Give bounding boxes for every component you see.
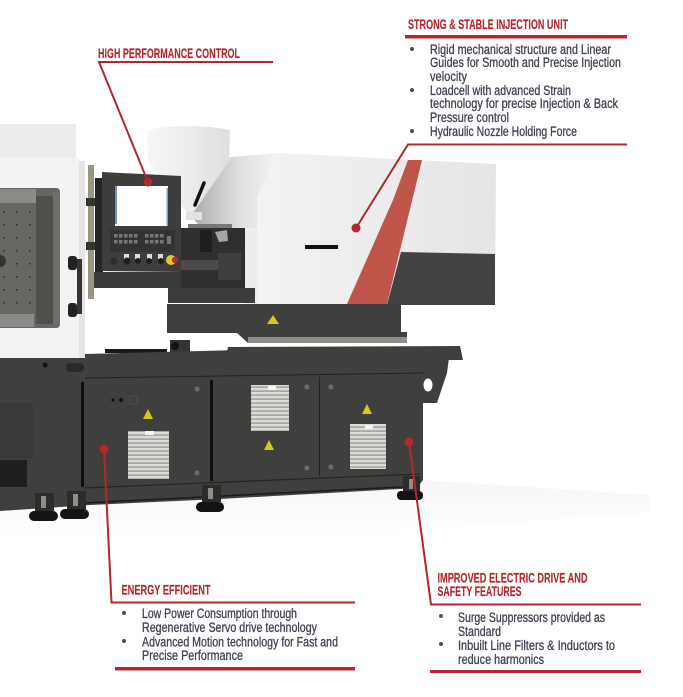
heading: electric drive: SAFETY FEATURES bbox=[438, 583, 522, 599]
heading: injection unit: STRONG & STABLE INJECTION UNIT bbox=[408, 16, 568, 32]
bullet list: electric drive: Standard bbox=[458, 624, 501, 639]
heading: electric drive: IMPROVED ELECTRIC DRIVE AND bbox=[438, 570, 588, 586]
bullet list: injection unit bbox=[410, 42, 621, 139]
vent louvers bbox=[128, 385, 386, 479]
callout: strong and stable injection unit bbox=[352, 16, 627, 232]
leader line: energy bbox=[100, 444, 355, 602]
leader line: injection unit bbox=[352, 144, 627, 232]
machine base bbox=[0, 350, 450, 511]
bullet list: energy bbox=[122, 606, 338, 663]
heading: control: HIGH PERFORMANCE CONTROL bbox=[98, 45, 240, 61]
bullet list: injection unit: Pressure control bbox=[430, 110, 509, 125]
callout: energy efficient bbox=[100, 444, 355, 670]
bullet list: electric drive: reduce harmonics bbox=[458, 652, 544, 667]
bullet list: energy: Precise Performance bbox=[142, 648, 243, 663]
dark lower cover bbox=[387, 252, 495, 305]
bullet list: injection unit: velocity bbox=[430, 69, 467, 84]
callout: high performance control bbox=[98, 45, 273, 186]
bullet list: electric drive bbox=[439, 610, 615, 667]
control panel bbox=[94, 172, 181, 288]
bullet list: energy: Advanced Motion technology for Fast and bbox=[142, 634, 338, 650]
heading: energy: ENERGY EFFICIENT bbox=[122, 582, 211, 598]
clamping unit guard door bbox=[0, 124, 95, 358]
leader line: control bbox=[99, 62, 273, 186]
bullet list: injection unit: Hydraulic Nozzle Holding Force bbox=[430, 124, 577, 139]
bullet list: energy: Low Power Consumption through bbox=[142, 606, 297, 621]
heading: electric drive bbox=[438, 570, 588, 599]
red stripe bbox=[347, 160, 422, 304]
bullet list: injection unit: Guides for Smooth and Precise Injection bbox=[430, 55, 621, 70]
warning triangles bbox=[143, 404, 372, 450]
leader line: electric drive bbox=[404, 438, 641, 604]
hopper bbox=[147, 126, 278, 304]
bullet list: electric drive: Inbuilt Line Filters & Inductors to bbox=[458, 638, 615, 653]
machine feet bbox=[29, 476, 423, 521]
bullet list: electric drive: Surge Suppressors provided as bbox=[458, 610, 605, 625]
machine illustration bbox=[0, 124, 496, 521]
bullet list: injection unit: Loadcell with advanced Strain bbox=[430, 83, 571, 98]
bullet list: injection unit: technology for precise Injection & Back bbox=[430, 96, 618, 111]
injection unit cover bbox=[257, 153, 496, 305]
floor shadow bbox=[0, 480, 650, 540]
injection mechanism bbox=[168, 224, 255, 303]
bullet list: energy: Regenerative Servo drive technology bbox=[142, 620, 317, 635]
carriage base bbox=[105, 304, 463, 360]
callout: improved electric drive and safety features bbox=[404, 438, 641, 673]
bullet list: injection unit: Rigid mechanical structure and Linear bbox=[430, 42, 611, 57]
